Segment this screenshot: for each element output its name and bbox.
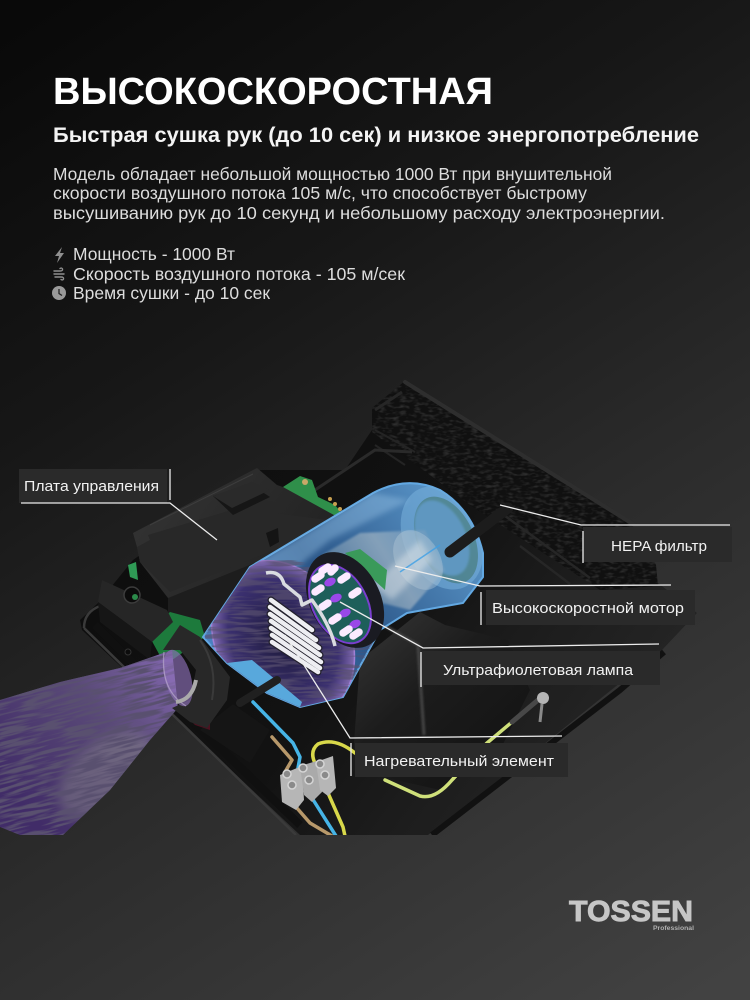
wires bbox=[253, 700, 538, 836]
heating element bbox=[266, 572, 335, 672]
filter panel bbox=[370, 380, 660, 590]
label: control board: Плата управления bbox=[24, 478, 159, 495]
description text bbox=[53, 164, 665, 223]
spec list bbox=[52, 244, 405, 303]
icon: clock bbox=[52, 286, 66, 300]
rear shaft bbox=[450, 508, 508, 552]
spray cloud bbox=[0, 650, 178, 835]
label: UV lamp: Ультрафиолетовая лампа bbox=[443, 662, 634, 679]
label: heating element bbox=[285, 635, 568, 777]
subtitle: Быстрая сушка рук (до 10 сек) и низкое энергопотребление bbox=[53, 123, 699, 147]
motor housing bbox=[202, 482, 484, 708]
nozzle support block bbox=[236, 676, 281, 707]
nozzle ring bbox=[158, 625, 230, 730]
earth wire right bbox=[385, 722, 512, 797]
blue wire bbox=[253, 702, 336, 836]
label: HEPA filter bbox=[500, 505, 732, 563]
label: motor bbox=[395, 566, 695, 625]
tray base bbox=[80, 430, 696, 835]
transformer box bbox=[352, 612, 530, 790]
brown wire bbox=[272, 737, 332, 836]
label: UV lamp bbox=[340, 602, 660, 687]
green board under nozzle bbox=[152, 612, 204, 660]
logo: TOSSEN bbox=[569, 896, 693, 928]
description text: высушиванию рук до 10 секунд и небольшому расходу электроэнергии. bbox=[53, 203, 665, 223]
tray left groove bbox=[95, 625, 300, 825]
logo: Professional bbox=[653, 925, 694, 932]
rail behind motor bbox=[315, 450, 412, 490]
UV lamp disc bbox=[306, 552, 384, 648]
label: control board bbox=[19, 469, 217, 540]
structure under control box bbox=[168, 563, 254, 634]
mounting post bbox=[98, 585, 173, 656]
description text: скорости воздушного потока 105 м/с, что способствует быстрому bbox=[53, 183, 587, 203]
tray rim left bbox=[84, 606, 296, 835]
green clip bbox=[128, 562, 138, 580]
terminal blocks bbox=[280, 756, 336, 810]
earth wire bbox=[313, 742, 355, 836]
motor inner cylinder bbox=[322, 530, 444, 611]
spec: power: Мощность - 1000 Вт bbox=[73, 244, 235, 264]
label: motor: Высокоскоростной мотор bbox=[492, 600, 684, 617]
ground screw bbox=[537, 692, 549, 722]
control box bbox=[133, 468, 343, 598]
spec: air speed: Скорость воздушного потока - 105 м/сек bbox=[73, 264, 405, 284]
label: HEPA filter: HEPA фильтр bbox=[611, 538, 707, 555]
green circuit board bbox=[283, 476, 342, 516]
tray rim right bbox=[432, 652, 664, 835]
icon: lightning bolt bbox=[55, 247, 64, 263]
product illustration: hand dryer cutaway bbox=[0, 380, 696, 835]
title: ВЫСОКОСКОРОСТНАЯ bbox=[53, 71, 493, 113]
description text: Модель обладает небольшой мощностью 1000 Вт при внушительной bbox=[53, 164, 612, 184]
spec: drying time: Время сушки - до 10 сек bbox=[73, 283, 270, 303]
grounding lead bbox=[512, 700, 538, 722]
label: heating element: Нагревательный элемент bbox=[364, 753, 554, 770]
icon: wind bbox=[54, 268, 64, 280]
